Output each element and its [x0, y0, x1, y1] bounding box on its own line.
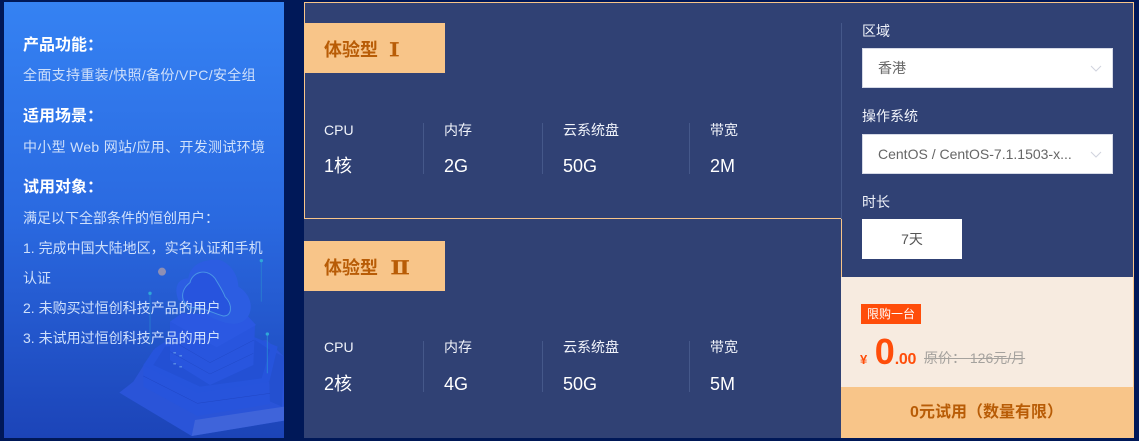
divider — [542, 123, 543, 174]
text: condition 2: 2. 未购买过恒创科技产品的用户 — [23, 300, 221, 316]
panel: plan I (selected) — [304, 2, 842, 219]
text: condition 1 continued: 认证 — [23, 270, 51, 286]
spec: plan II memory: 内存 — [444, 339, 472, 355]
spec: plan II disk: 50G — [563, 374, 597, 394]
spec: plan I CPU: 1核 — [324, 156, 352, 176]
text: audience conditions: 满足以下全部条件的恒创用户： — [23, 210, 219, 226]
base — [119, 340, 284, 436]
spec: plan II memory — [444, 339, 472, 394]
button: trial — [841, 387, 1134, 438]
divider — [689, 341, 690, 392]
tag: plan II — [304, 241, 445, 291]
panel: product info sidebar — [4, 2, 284, 438]
spec: plan I bandwidth — [710, 122, 738, 176]
heading: audience: 试用对象： — [23, 179, 103, 196]
heading: scenarios: 适用场景： — [23, 108, 103, 125]
divider — [689, 123, 690, 174]
spec: plan II CPU: CPU — [324, 339, 354, 355]
price: zero: ¥ 0.00 — [860, 331, 916, 372]
label: operating system: 操作系统 — [862, 108, 918, 124]
divider — [841, 23, 842, 219]
spec: plan I disk: 云系统盘 — [563, 122, 619, 138]
ledge — [143, 337, 278, 393]
spec: plan I bandwidth: 带宽 — [710, 122, 738, 138]
spec: plan II bandwidth: 5M — [710, 374, 735, 394]
divider — [542, 341, 543, 392]
select: operating system: CentOS / CentOS-7.1.1503-x... — [878, 146, 1072, 162]
spec: plan II disk: 云系统盘 — [563, 339, 619, 355]
spec: plan I memory: 2G — [444, 156, 468, 176]
server — [170, 322, 255, 385]
spec: plan I CPU: CPU — [324, 122, 354, 138]
spec: plan I memory — [444, 122, 472, 176]
illustration: cloud server — [120, 259, 284, 436]
divider: selected plan edge — [841, 219, 842, 277]
badge: limit one — [861, 304, 921, 324]
badge: limit one: 限购一台 — [867, 307, 915, 321]
spec: plan I bandwidth: 2M — [710, 156, 735, 176]
original price: 原价： 126元/月 — [924, 350, 1025, 366]
label: duration: 时长 — [862, 194, 890, 210]
tag: plan I: Ⅰ — [384, 36, 405, 62]
spec: plan II bandwidth — [710, 339, 738, 394]
heading: features: 产品功能： — [23, 37, 103, 54]
tag: plan I — [304, 23, 445, 73]
spec: plan II bandwidth: 带宽 — [710, 339, 738, 355]
icon: chevron — [1090, 152, 1102, 158]
text: condition 1: 1. 完成中国大陆地区，实名认证和手机 — [23, 240, 263, 256]
cloud face — [183, 272, 230, 316]
select: operating system — [862, 134, 1113, 174]
spec: plan II CPU: 2核 — [324, 374, 352, 394]
panel: price — [841, 277, 1133, 388]
button: 7 days — [862, 219, 962, 259]
spec: plan I memory: 内存 — [444, 122, 472, 138]
spec: plan I disk — [563, 122, 619, 176]
text: features: 全面支持重装/快照/备份/VPC/安全组 — [23, 67, 256, 83]
divider — [423, 123, 424, 174]
button: trial: 0元试用（数量有限） — [910, 404, 1063, 421]
spec: plan II CPU — [324, 339, 354, 394]
spec: plan I disk: 50G — [563, 156, 597, 176]
tag: plan II: Ⅱ — [388, 254, 412, 280]
label: region: 区域 — [862, 23, 890, 39]
cloud back — [176, 260, 251, 324]
select: region — [862, 48, 1113, 88]
spec: plan I CPU — [324, 122, 354, 176]
select: region: 香港 — [878, 60, 906, 76]
spec: plan II memory: 4G — [444, 374, 468, 394]
beacons — [148, 293, 151, 345]
panel: main plans area — [304, 2, 1134, 438]
button: 7 days: 7天 — [901, 231, 923, 247]
panel: order options — [841, 2, 1134, 438]
lower tier — [143, 365, 270, 416]
divider — [423, 341, 424, 392]
icon: chevron — [1090, 66, 1102, 72]
text: scenarios: 中小型 Web 网站/应用、开发测试环境 — [23, 139, 265, 155]
tag: plan II: 体验型 — [324, 258, 378, 278]
tag: plan I: 体验型 — [324, 40, 378, 60]
text: condition 3: 3. 未试用过恒创科技产品的用户 — [23, 330, 221, 346]
spec: plan II disk — [563, 339, 619, 394]
